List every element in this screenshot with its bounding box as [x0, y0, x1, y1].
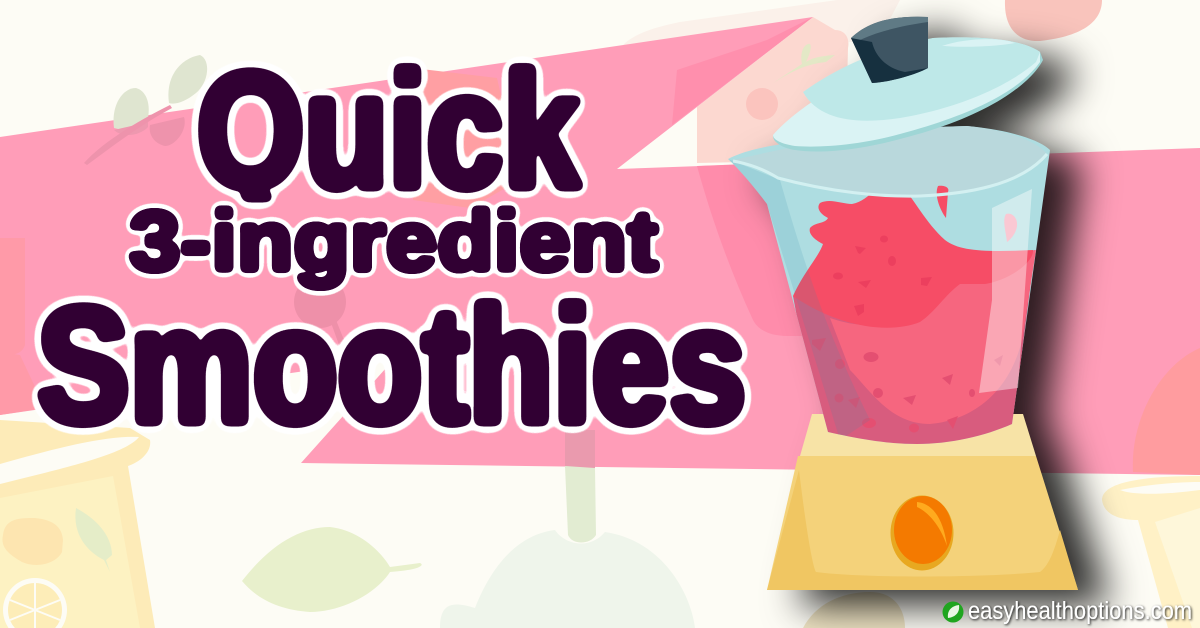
icon: green leaf badge [942, 602, 964, 622]
ghost illustration: cup body under pink band [697, 162, 805, 336]
glass highlight [979, 189, 1032, 393]
ghost icon: salmon cup at left [0, 352, 45, 415]
ghost icon: red blob right [1133, 348, 1200, 475]
splash drops [937, 186, 1017, 242]
ghost illustration: lemonade jar right [1102, 476, 1200, 628]
ghost illustration: lemonade jar bottom left [0, 420, 155, 628]
ghost icon: straw at left edge [0, 238, 25, 355]
ghost icon: leaves top left [84, 55, 207, 165]
fruit bits [833, 236, 932, 316]
ghost icon: big leaf [242, 527, 422, 612]
ghost icon: mint apple [440, 530, 695, 628]
ghost illustration: pale cup over notch [697, 17, 848, 163]
front rim [733, 154, 1047, 196]
blender base top [800, 414, 1036, 456]
ghost icon: straw centre [565, 430, 596, 542]
upper splash [793, 182, 1033, 328]
blender jar [728, 126, 1050, 450]
ghost icon: sprig on cup [746, 44, 835, 120]
title line: 3-ingredient: 3-ingredient [129, 194, 658, 288]
knob [851, 17, 928, 83]
ghost icon: peach rectangle behind title [413, 68, 520, 208]
ghost illustration: cup rim top [617, 0, 900, 62]
ghost icon: strawberry blob top right [1005, 0, 1102, 41]
title [37, 38, 746, 457]
ghost icon: beige blob under blender [803, 592, 905, 628]
title line: Quick: Quick [197, 38, 580, 222]
shaded jar side [728, 159, 870, 440]
liquid [728, 159, 1036, 450]
title line: Smoothies: Smoothies [37, 273, 746, 457]
button [890, 496, 954, 570]
lid [773, 37, 1043, 152]
logo [942, 597, 1192, 625]
pink angular band [0, 17, 1200, 475]
jar interior [733, 126, 1046, 195]
blender [728, 17, 1078, 590]
blender base [767, 456, 1078, 590]
ghost illustration: darker cup wedge on pink [672, 17, 813, 125]
ghost icon: cherries behind title [294, 276, 358, 375]
